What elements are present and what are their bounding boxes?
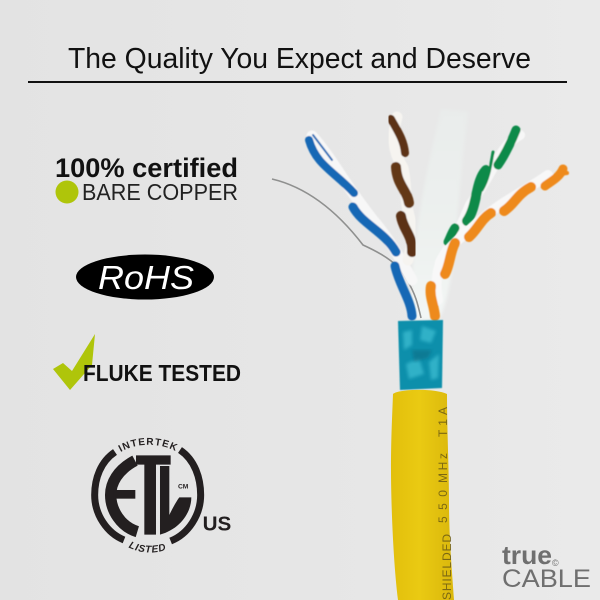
jacket printed text: T1A	[436, 407, 450, 437]
title underline	[28, 81, 567, 83]
jacket printed text: SHIELDED	[440, 534, 454, 600]
badge: ETL listed logo: CM	[178, 484, 189, 491]
jacket printed text: 550	[436, 490, 450, 523]
photo: twisted pair cable	[272, 109, 567, 600]
blue pair	[309, 135, 412, 316]
badge: ETL listed logo: INTERTEK	[118, 438, 178, 452]
badge: RoHS	[76, 254, 214, 300]
yellow jacket	[391, 390, 454, 600]
foil shield	[398, 320, 443, 390]
foil film	[412, 109, 468, 320]
jacket printed text: MHz	[436, 453, 450, 483]
badge: ETL listed logo	[91, 438, 231, 553]
jacket printed text	[436, 407, 454, 600]
badge: 100% certified bare copper	[55, 153, 238, 205]
badge: 100% certified bare copper: BARE COPPER	[82, 179, 238, 205]
logo: trueCABLE: ©	[552, 558, 559, 568]
logo: trueCABLE: CABLE	[502, 565, 591, 593]
title: The Quality You Expect and Deserve	[68, 43, 531, 75]
drain wire	[272, 179, 421, 318]
brown pair	[391, 117, 413, 260]
badge: Fluke tested	[53, 334, 241, 390]
badge: RoHS: RoHS	[98, 259, 194, 296]
badge: ETL listed logo: US	[203, 512, 231, 535]
badge: ETL listed logo: LISTED	[128, 542, 165, 553]
green pair	[440, 130, 520, 262]
badge: 100% certified bare copper: 100% certified	[55, 153, 238, 183]
orange pair	[431, 169, 567, 316]
logo: trueCABLE: true	[502, 540, 552, 570]
badge: Fluke tested: FLUKE TESTED	[83, 360, 241, 386]
logo: trueCABLE	[502, 540, 591, 593]
